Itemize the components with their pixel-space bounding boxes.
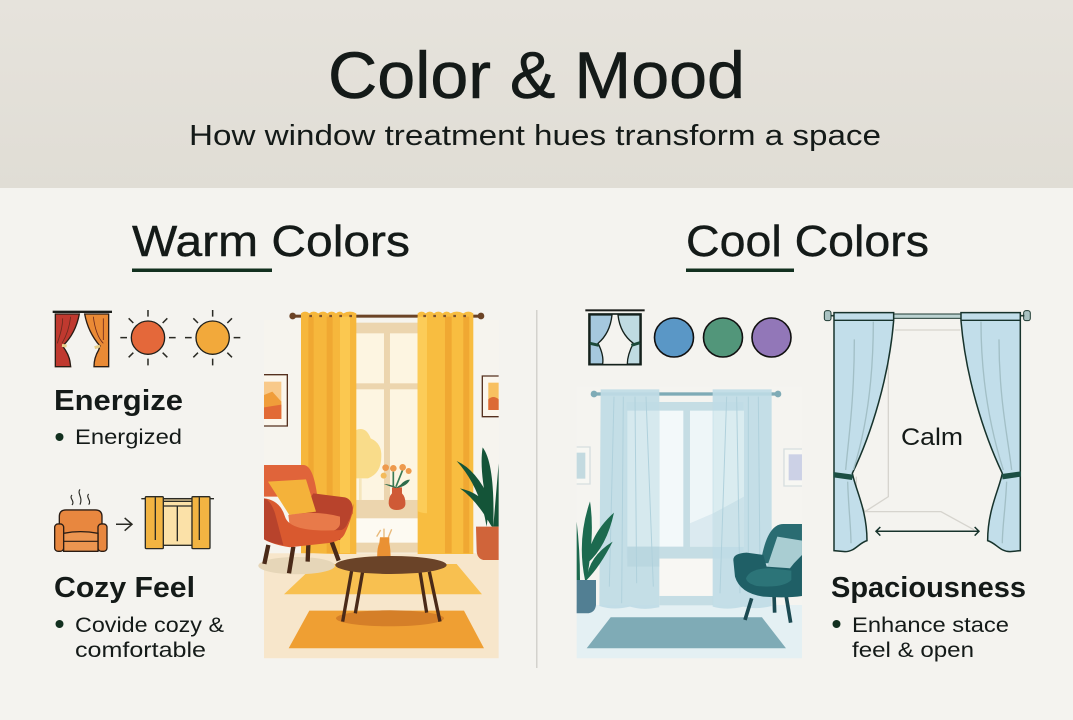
text block: spaciousness: Spaciousness [831, 572, 1026, 604]
illustration: open curtains [824, 311, 1030, 552]
window [353, 323, 420, 553]
text block: spaciousness: Enhance stace [852, 614, 1009, 637]
armchair [264, 465, 353, 573]
illustration: warm living room [258, 312, 499, 658]
left curtain [301, 312, 356, 554]
wall art left [577, 447, 590, 484]
heading: warm colors: Warm Colors [132, 217, 410, 266]
text block: spaciousness: feel & open [852, 639, 974, 662]
subtitle: How window treatment hues transform a space [189, 120, 881, 152]
wall art right [482, 376, 499, 417]
heading: cool colors: Cool Colors [686, 217, 929, 266]
rod [824, 311, 1030, 321]
icon: red sun [120, 310, 176, 365]
plant [577, 501, 614, 613]
swatch: blue [654, 318, 694, 357]
text block: energize [54, 385, 183, 449]
icon: yellow sun [185, 310, 240, 365]
right sheer curtain [713, 389, 772, 609]
icon: cozy armchair [55, 489, 107, 551]
label: calm: Calm [901, 424, 963, 451]
icon: warm curtain [53, 311, 112, 367]
illustration: cool living room [577, 387, 802, 658]
panel: warm colors [53, 310, 499, 662]
text block: cozy feel [54, 572, 224, 662]
wall art right [784, 449, 802, 486]
rug [587, 617, 786, 648]
curtain rod [289, 313, 484, 319]
floor rug front [289, 611, 484, 648]
flower vase [381, 464, 412, 510]
text block: energize: Energize [54, 385, 183, 417]
left sheer curtain [599, 389, 659, 609]
double arrow [876, 527, 979, 536]
text block: energize: Energized [75, 426, 182, 449]
window [627, 402, 743, 605]
curtain rod [591, 391, 781, 397]
icon: cool curtain [585, 309, 645, 365]
armchair [733, 524, 802, 623]
floor rug back [284, 564, 482, 594]
swatch: purple [752, 318, 791, 357]
left curtain [833, 313, 894, 552]
plant [457, 447, 499, 560]
icon: window with yellow curtains [141, 497, 214, 549]
header banner [0, 0, 1073, 188]
right curtain [418, 312, 473, 554]
wall art left [264, 375, 287, 426]
swatch: green [704, 318, 742, 357]
text block: cozy feel: Cozy Feel [54, 572, 195, 604]
text block: spaciousness [831, 572, 1026, 662]
title: Color & Mood [328, 38, 745, 112]
text block: cozy feel: Covide cozy & [75, 614, 224, 637]
panel: cool colors [577, 309, 1030, 662]
window outline [856, 330, 974, 530]
icon: arrow [116, 518, 132, 531]
text block: cozy feel: comfortable [75, 639, 206, 662]
right curtain [961, 313, 1021, 552]
coffee table [335, 529, 447, 622]
